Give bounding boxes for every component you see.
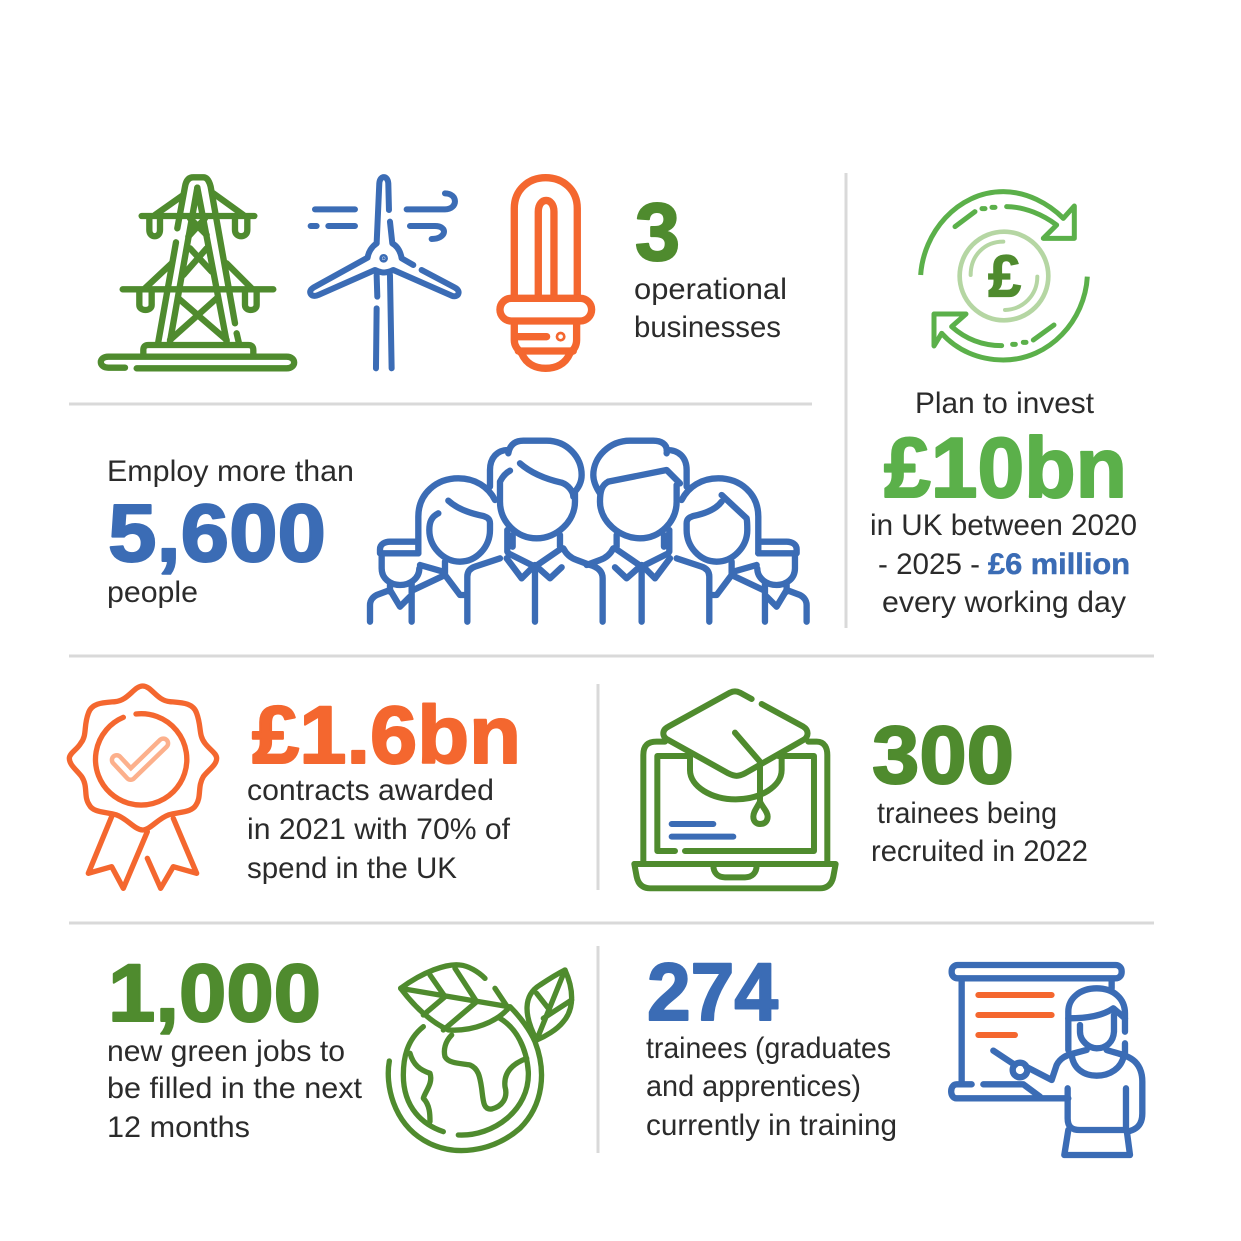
stat: plan to invest £10bn: £10bn bbox=[884, 421, 1127, 516]
stat: employ more than 5,600 people: 5,600 bbox=[108, 488, 326, 579]
stat: £1.6bn contracts: in 2021 with 70% of bbox=[247, 813, 511, 846]
stat: employ more than 5,600 people: Employ more than bbox=[107, 455, 354, 488]
stat: 1,000 new green jobs: 12 months bbox=[107, 1111, 250, 1144]
icon: group of people bbox=[370, 441, 807, 622]
stat: 3 operational businesses bbox=[634, 187, 787, 344]
stat: plan to invest £10bn: Plan to invest bbox=[915, 387, 1095, 420]
stat: plan to invest £10bn: every working day bbox=[882, 586, 1126, 619]
stat: 300 trainees: recruited in 2022 bbox=[871, 835, 1088, 868]
stat: 300 trainees: 300 bbox=[872, 710, 1014, 801]
stat: 3 operational businesses: businesses bbox=[634, 311, 781, 344]
icon: award rosette bbox=[69, 686, 217, 888]
icon: wind turbine bbox=[310, 177, 459, 368]
icon: teacher at presentation board bbox=[951, 965, 1142, 1155]
icon: laptop with graduation cap bbox=[634, 691, 836, 888]
stat: 274 trainees: currently in training bbox=[646, 1109, 897, 1142]
stat: 3 operational businesses: 3 bbox=[635, 187, 680, 278]
icon: globe with leaves bbox=[388, 965, 572, 1151]
stat: 1,000 new green jobs: 1,000 bbox=[108, 948, 321, 1039]
stat: £1.6bn contracts: £1.6bn bbox=[252, 690, 521, 781]
stat: 1,000 new green jobs: be filled in the next bbox=[107, 1072, 363, 1105]
icon: pound circular investment: £ bbox=[988, 243, 1021, 310]
stat: £1.6bn contracts: spend in the UK bbox=[247, 852, 457, 885]
stat: plan to invest £10bn bbox=[870, 387, 1137, 619]
stat: 300 trainees bbox=[871, 710, 1088, 868]
stat: 1,000 new green jobs: new green jobs to bbox=[107, 1035, 345, 1068]
icon: pound circular investment bbox=[921, 192, 1087, 360]
stat: plan to invest £10bn: £6 million bbox=[988, 548, 1130, 581]
stat: plan to invest £10bn: in UK between 2020 bbox=[870, 509, 1137, 542]
stat: 300 trainees: trainees being bbox=[877, 797, 1057, 830]
stat: 274 trainees: and apprentices) bbox=[646, 1070, 861, 1103]
stat: 274 trainees bbox=[646, 947, 897, 1142]
stat: employ more than 5,600 people bbox=[107, 455, 354, 609]
stat: 274 trainees: trainees (graduates bbox=[646, 1032, 891, 1065]
stat: plan to invest £10bn: - 2025 - bbox=[878, 548, 980, 581]
icon: electricity pylon bbox=[101, 177, 294, 368]
icon: light bulb bbox=[500, 178, 592, 368]
stat: employ more than 5,600 people: people bbox=[107, 576, 198, 609]
stat: 274 trainees: 274 bbox=[647, 947, 778, 1038]
stat: 3 operational businesses: operational bbox=[634, 273, 787, 306]
stat: 1,000 new green jobs bbox=[107, 948, 363, 1144]
stat: £1.6bn contracts: contracts awarded bbox=[247, 774, 494, 807]
stat: £1.6bn contracts bbox=[247, 690, 521, 885]
